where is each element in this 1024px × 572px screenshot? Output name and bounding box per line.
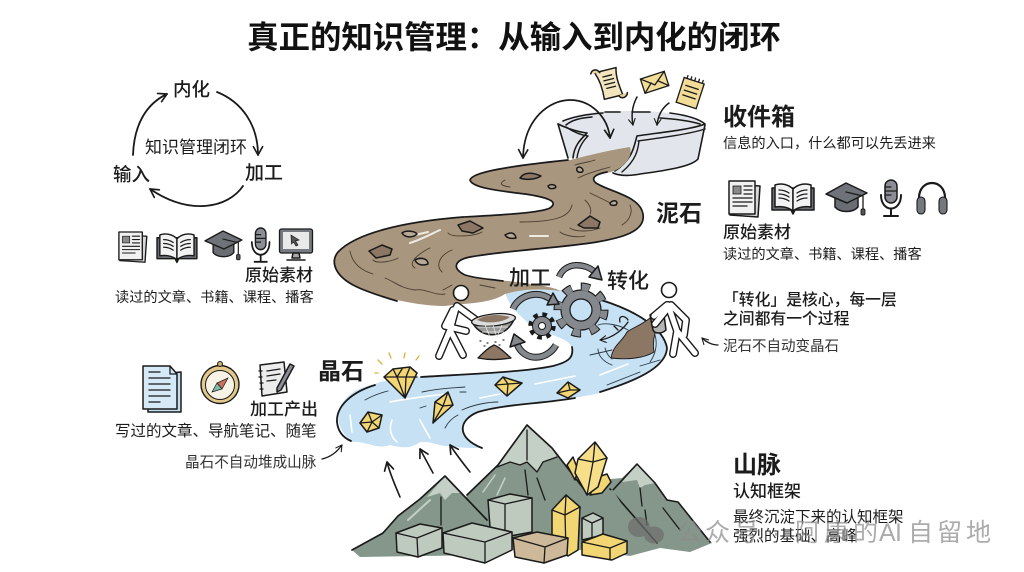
note arrow — [322, 445, 342, 459]
river highlights — [350, 364, 628, 442]
crystal column — [552, 495, 580, 556]
note: crystals do not pile automatically: 晶石不自动堆成山脉 — [185, 454, 317, 471]
small gear — [531, 315, 553, 337]
arrow: item falling in bowl 1 — [632, 97, 637, 125]
arrow: crystals up from mountain 2 — [420, 449, 433, 473]
mountain description line two: 强烈的基础、高峰 — [733, 527, 857, 545]
label: 晶石: 晶石 — [318, 358, 364, 384]
left materials description: 读过的文章、书籍、课程、播客 — [115, 289, 314, 306]
mud flow lines — [350, 160, 631, 294]
bowl body — [558, 111, 705, 175]
panel: transformation text — [723, 291, 897, 355]
icon: headphones — [917, 183, 947, 214]
panel: left raw materials — [115, 228, 314, 306]
river bank upper — [337, 347, 572, 441]
transformation statement line two: 之间都有一个过程 — [723, 310, 850, 328]
mud river banks — [334, 160, 568, 301]
loop label: 输入: 输入 — [113, 164, 150, 185]
gem right — [557, 382, 580, 398]
mud pile — [478, 345, 511, 360]
right materials heading: 原始素材 — [723, 223, 791, 242]
transformation sparks — [600, 322, 628, 340]
mountain description: 最终沉淀下来的认知框架 — [733, 508, 904, 526]
river banks — [463, 300, 667, 448]
sieve — [471, 312, 516, 338]
icon: microphone — [881, 180, 901, 216]
illustration: mud river — [334, 147, 643, 306]
icon: microphone — [252, 228, 269, 262]
box: tall grey — [488, 494, 532, 537]
box: tan — [513, 532, 568, 563]
figure outline — [654, 305, 695, 354]
mountain subheading: 认知框架 — [733, 482, 801, 501]
illustration: right figure pouring — [598, 282, 695, 366]
icon: graduation cap — [826, 183, 867, 215]
arrow: crystals up from mountain 3 — [450, 445, 470, 472]
icon: envelope — [640, 71, 669, 93]
figure fill — [654, 305, 695, 354]
loop arrow: process to input — [150, 186, 243, 206]
process arrow bottom — [510, 334, 556, 357]
icon: article — [119, 232, 147, 262]
icon: sticky note — [676, 75, 705, 109]
loop arrow: internalise to process — [217, 92, 258, 155]
bowl outline — [558, 112, 705, 175]
loop label: 加工: 加工 — [245, 162, 283, 184]
arrow: crystals up from mountain 1 — [387, 462, 400, 497]
right materials description: 读过的文章、书籍、课程、播客 — [723, 246, 922, 263]
big mountain — [450, 425, 650, 550]
panel: inbox text — [723, 104, 936, 152]
poured mud — [611, 318, 660, 359]
large sparkling diamond — [375, 353, 419, 398]
output description: 写过的文章、导航笔记、随笔 — [115, 422, 317, 440]
illustration: blue river — [337, 290, 667, 448]
gem middle — [495, 377, 522, 396]
box: yellow — [582, 534, 627, 560]
label: 泥石: 泥石 — [656, 200, 702, 226]
illustration: crystals in river — [360, 353, 580, 432]
inbox heading: 收件箱 — [723, 104, 795, 131]
big gear — [558, 287, 604, 333]
mud rocks — [369, 167, 617, 265]
panel: mountain text — [733, 452, 904, 545]
loop arrow: input to internalise — [133, 94, 167, 155]
icon: notebook and pencil — [259, 362, 294, 396]
illustration: left figure sieving — [439, 286, 516, 360]
figure fill — [439, 306, 476, 356]
illustration: mountain range — [352, 425, 712, 563]
icon: scroll — [590, 64, 628, 104]
icon: written document — [143, 366, 181, 412]
gem lower left — [360, 412, 382, 432]
mud river inner bank — [456, 172, 643, 281]
transformation arrow — [559, 265, 602, 280]
mountain heading: 山脉 — [733, 452, 781, 479]
left materials heading: 原始素材 — [245, 266, 313, 285]
box: small grey — [582, 513, 603, 540]
mud highlights — [410, 230, 548, 243]
icon: monitor — [280, 229, 312, 260]
panel: right raw materials — [723, 180, 947, 263]
process arrow top — [513, 293, 559, 309]
watermark icon — [628, 517, 664, 544]
river flow lines — [365, 324, 656, 428]
falling grains — [480, 340, 504, 346]
icon: article — [729, 181, 760, 217]
transformation statement: 「转化」是核心，每一层 — [723, 291, 897, 309]
icon: graduation cap — [205, 231, 242, 260]
arrow to note: mud to crystal — [702, 338, 718, 345]
watermark text: 公众号·阿康的AI自留地 — [677, 519, 991, 547]
watermark — [628, 517, 991, 547]
right mountain — [600, 464, 712, 556]
icon: book — [772, 184, 814, 214]
label: 转化 centre: 转化 — [607, 270, 649, 293]
label: 加工 centre: 加工 — [509, 267, 551, 290]
box: wide grey — [443, 523, 512, 563]
loop label: 内化: 内化 — [173, 79, 210, 100]
output heading: 加工产出 — [250, 400, 318, 419]
panel: knowledge loop — [113, 79, 283, 206]
crystal shard — [433, 392, 453, 423]
small left mountain — [352, 476, 490, 557]
loop centre label: 知识管理闭环 — [145, 138, 247, 157]
box: left grey — [396, 524, 442, 557]
figure head — [454, 286, 468, 300]
pail — [650, 312, 666, 333]
inbox description: 信息的入口，什么都可以先丢进来 — [723, 135, 936, 152]
arrow: curved double arrow at inbox — [523, 100, 610, 158]
illustration: gears and process arrows — [510, 265, 604, 357]
water ripples — [598, 348, 660, 366]
figure head — [662, 282, 676, 298]
panel: produced output — [115, 362, 342, 471]
arrow: item falling in bowl 2 — [657, 103, 669, 125]
note: mud does not become crystal: 泥石不自动变晶石 — [723, 338, 839, 355]
illustration: inbox bowl — [558, 111, 705, 175]
crystal cluster — [567, 442, 611, 495]
transformation swirl — [614, 316, 628, 330]
title: 真正的知识管理：从输入到内化的闭环 — [247, 20, 781, 55]
icon: compass — [201, 362, 239, 404]
icon: book — [157, 234, 197, 262]
figure outline — [439, 306, 476, 356]
